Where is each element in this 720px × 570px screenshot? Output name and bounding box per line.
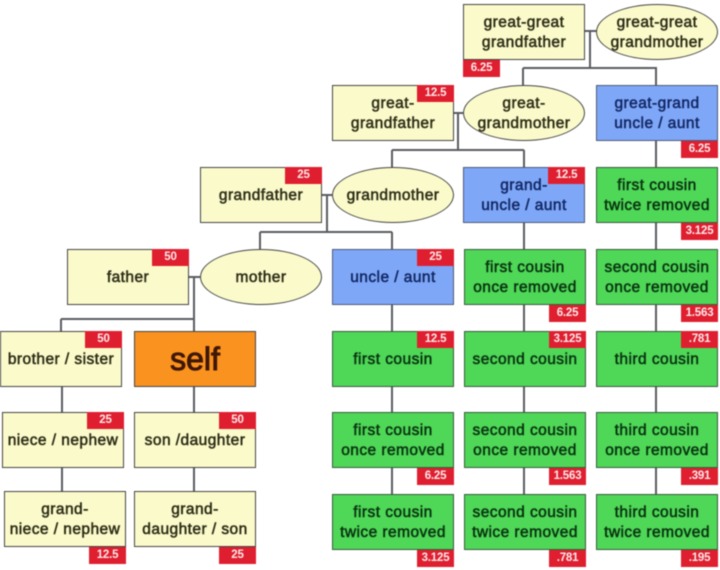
node: grand-uncle / aunt: uncle / aunt bbox=[481, 197, 567, 214]
node: grandfather: grandfather bbox=[219, 187, 303, 204]
node: first cousin once removed, column 1: once removed bbox=[341, 442, 445, 459]
node: second cousin once removed, column 2: 1.563 bbox=[554, 470, 581, 482]
node: grandmother: grandmother bbox=[347, 187, 439, 204]
node: first cousin: 12.5 bbox=[425, 333, 446, 345]
node: first cousin once removed, column 2 bbox=[463, 248, 587, 323]
node: brother / sister: brother / sister bbox=[8, 351, 114, 368]
node: uncle / aunt bbox=[331, 248, 455, 306]
node: second cousin bbox=[463, 330, 587, 388]
node: third cousin twice removed: third cousin bbox=[615, 504, 699, 521]
node: second cousin twice removed: twice removed bbox=[472, 524, 578, 541]
node: first cousin twice removed, column 3 bbox=[595, 166, 719, 241]
node: first cousin once removed, column 2: once removed bbox=[473, 279, 577, 296]
node: mother: mother bbox=[236, 269, 286, 286]
node: son / daughter bbox=[133, 411, 257, 469]
node: first cousin twice removed, column 1: 3.125 bbox=[422, 552, 449, 564]
node: great-grand uncle / aunt bbox=[595, 84, 719, 159]
node: first cousin twice removed, column 1: first cousin bbox=[353, 504, 433, 521]
node: first cousin twice removed, column 3: first cousin bbox=[617, 177, 697, 194]
node: grand-uncle / aunt: 12.5 bbox=[556, 169, 577, 181]
node: first cousin once removed, column 1: first cousin bbox=[353, 422, 433, 439]
node: great-grandfather: grandfather bbox=[351, 115, 435, 132]
node: great-grand uncle / aunt: uncle / aunt bbox=[614, 115, 700, 132]
node: third cousin once removed: third cousin bbox=[615, 422, 699, 439]
node: grand-uncle / aunt bbox=[462, 166, 586, 224]
node: third cousin once removed bbox=[595, 411, 719, 486]
node: third cousin once removed: .391 bbox=[689, 470, 710, 482]
node: son / daughter: son /daughter bbox=[145, 432, 245, 449]
node: second cousin once removed, column 3 bbox=[595, 248, 719, 323]
node: great-grandmother: grandmother bbox=[478, 115, 570, 132]
node: third cousin twice removed bbox=[595, 493, 719, 568]
node: grandfather: 25 bbox=[297, 169, 310, 181]
node: great-great grandmother: grandmother bbox=[611, 34, 703, 51]
node: father: 50 bbox=[164, 251, 177, 263]
node: grand-niece / nephew: 12.5 bbox=[97, 549, 118, 561]
node: great-grandmother bbox=[462, 84, 586, 142]
node: great-great grandmother bbox=[595, 3, 719, 61]
node: second cousin once removed, column 3: second cousin bbox=[605, 259, 709, 276]
node: father bbox=[66, 248, 190, 306]
node: grand-uncle / aunt: grand- bbox=[500, 177, 548, 194]
node: great-grandmother: great- bbox=[502, 95, 546, 112]
node: son / daughter: 50 bbox=[231, 414, 244, 426]
node: great-grandfather: great- bbox=[371, 95, 415, 112]
node: niece / nephew: 25 bbox=[99, 414, 112, 426]
node: third cousin twice removed: .195 bbox=[689, 552, 710, 564]
node: grand-daughter / son: daughter / son bbox=[142, 521, 248, 538]
node: first cousin twice removed, column 3: twice removed bbox=[604, 197, 710, 214]
node: first cousin bbox=[331, 330, 455, 388]
node: self: self bbox=[170, 341, 220, 377]
node: brother / sister bbox=[0, 330, 123, 388]
node: grand-daughter / son: 25 bbox=[231, 549, 244, 561]
node: great-grandfather bbox=[331, 84, 455, 142]
node: first cousin once removed, column 1 bbox=[331, 411, 455, 486]
node: second cousin once removed, column 2 bbox=[463, 411, 587, 486]
node: second cousin: second cousin bbox=[473, 351, 577, 368]
node: uncle / aunt: uncle / aunt bbox=[350, 269, 436, 286]
node: great-great grandfather: great-great bbox=[484, 14, 564, 31]
node: third cousin bbox=[595, 330, 719, 388]
node: first cousin twice removed, column 1: twice removed bbox=[340, 524, 446, 541]
node: third cousin twice removed: twice removed bbox=[604, 524, 710, 541]
node: niece / nephew: niece / nephew bbox=[8, 432, 118, 449]
node: second cousin once removed, column 2: second cousin bbox=[473, 422, 577, 439]
node: grandfather bbox=[199, 166, 323, 224]
node: great-great grandfather: grandfather bbox=[482, 34, 566, 51]
node: great-great grandfather: 6.25 bbox=[471, 62, 492, 74]
node: great-great grandfather bbox=[462, 3, 586, 78]
node: first cousin once removed, column 2: 6.25 bbox=[557, 307, 578, 319]
node: brother / sister: 50 bbox=[97, 333, 110, 345]
node: niece / nephew bbox=[1, 411, 125, 469]
node: third cousin once removed: once removed bbox=[605, 442, 709, 459]
node: first cousin once removed, column 2: first cousin bbox=[485, 259, 565, 276]
node: second cousin once removed, column 2: once removed bbox=[473, 442, 577, 459]
node: great-grand uncle / aunt: 6.25 bbox=[689, 143, 710, 155]
node: father: father bbox=[107, 269, 149, 286]
node: first cousin twice removed, column 3: 3.125 bbox=[686, 225, 713, 237]
node: grand-daughter / son: grand- bbox=[171, 501, 219, 518]
node: first cousin: first cousin bbox=[353, 351, 433, 368]
node: second cousin once removed, column 3: once removed bbox=[605, 279, 709, 296]
node: uncle / aunt: 25 bbox=[429, 251, 442, 263]
node: third cousin: .781 bbox=[689, 333, 710, 345]
node: second cousin twice removed: second cousin bbox=[473, 504, 577, 521]
node: great-great grandmother: great-great bbox=[617, 14, 697, 31]
node: first cousin once removed, column 1: 6.25 bbox=[425, 470, 446, 482]
node: grand-niece / nephew bbox=[3, 490, 127, 565]
node: great-grandfather: 12.5 bbox=[425, 87, 446, 99]
node: first cousin twice removed, column 1 bbox=[331, 493, 455, 568]
node: grand-daughter / son bbox=[133, 490, 257, 565]
node: third cousin: third cousin bbox=[615, 351, 699, 368]
node: grand-niece / nephew: niece / nephew bbox=[10, 521, 120, 538]
node: second cousin once removed, column 3: 1.563 bbox=[686, 307, 713, 319]
node: second cousin twice removed bbox=[463, 493, 587, 568]
node: grand-niece / nephew: grand- bbox=[41, 501, 89, 518]
node: second cousin: 3.125 bbox=[554, 333, 581, 345]
node: second cousin twice removed: .781 bbox=[557, 552, 578, 564]
node: great-grand uncle / aunt: great-grand bbox=[614, 95, 700, 112]
